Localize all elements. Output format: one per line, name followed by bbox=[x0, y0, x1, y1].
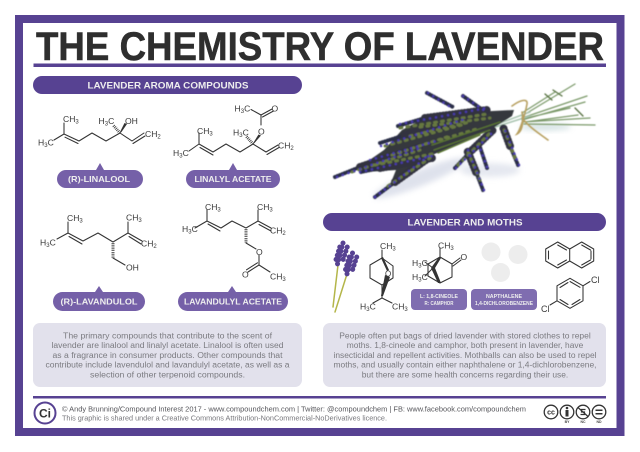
molecule: linalyl acetate: O bbox=[258, 126, 265, 136]
text block: aroma compounds: contribute include lavendulol and lavandulyl acetate, as well as a bbox=[46, 361, 290, 370]
molecule: lavandulol: 3 bbox=[46, 243, 50, 249]
stems bbox=[492, 84, 595, 128]
green stems over the mass bbox=[432, 122, 500, 153]
molecule: 1,8-cineole: CH bbox=[392, 302, 404, 312]
molecule: 1,8-cineole: 3 bbox=[392, 246, 396, 252]
icon: compound interest logo: Ci bbox=[39, 406, 51, 420]
text block: moths: but there are some health concerns regarding their use. bbox=[362, 370, 568, 379]
molecule: linalool: 3 bbox=[105, 122, 109, 128]
molecule: lavandulol: CH bbox=[126, 212, 138, 222]
panel: lavender aroma compounds bbox=[33, 76, 302, 387]
label: napthalene and dichlorobenzene bbox=[471, 289, 537, 310]
green buds bbox=[352, 114, 515, 186]
molecule: linalyl acetate: 2 bbox=[290, 146, 294, 152]
molecule: lavandulyl acetate bbox=[182, 202, 286, 283]
label: linalyl acetate: LINALYL ACETATE bbox=[194, 175, 272, 184]
molecule: 1,4-dichlorobenzene: Cl bbox=[541, 304, 550, 314]
label: cineole and camphor: L: 1,8-CINEOLE bbox=[420, 294, 459, 300]
molecule: linalyl acetate: 3 bbox=[209, 132, 213, 138]
molecule: lavandulyl acetate: C bbox=[192, 224, 198, 234]
molecule: lavandulyl acetate: H bbox=[182, 224, 188, 234]
molecule: camphor: C bbox=[422, 258, 428, 268]
molecule: camphor: H bbox=[412, 272, 418, 282]
spike bodies bbox=[360, 110, 510, 182]
credit line: © Andy Brunning/Compound Interest 2017 - www.compoundchem.com | Twitter: @compoundchem | FB: www.facebook.com/compoundchem bbox=[62, 406, 526, 414]
molecule: naphthalene bbox=[546, 242, 594, 268]
label: lavandulyl acetate: LAVANDULYL ACETATE bbox=[184, 298, 283, 306]
molecule: linalyl acetate: CH bbox=[197, 126, 209, 136]
molecule: lavandulyl acetate: 3 bbox=[188, 230, 192, 236]
molecule: linalyl acetate bbox=[173, 104, 294, 160]
molecule: camphor bbox=[412, 240, 468, 284]
title: THE CHEMISTRY OF LAVENDER bbox=[36, 25, 604, 69]
image: lavender bunch bbox=[335, 84, 595, 204]
molecule: 1,8-cineole: H bbox=[360, 302, 366, 312]
text block: aroma compounds: as a fragrance in consumer products. Other compounds that bbox=[52, 351, 283, 360]
molecule: linalool: C bbox=[48, 138, 54, 148]
molecule: camphor: CH bbox=[438, 240, 450, 250]
molecule: lavandulol bbox=[40, 212, 157, 272]
molecule: linalool: 2 bbox=[157, 134, 161, 140]
icon: creative commons licence bbox=[544, 405, 606, 424]
molecule: 1,8-cineole: 3 bbox=[404, 307, 408, 313]
label: napthalene and dichlorobenzene: NAPTHALENE bbox=[486, 294, 523, 300]
molecule: lavandulyl acetate: 3 bbox=[269, 208, 273, 214]
molecule: lavandulol: H bbox=[40, 238, 46, 248]
molecule: linalool: 3 bbox=[75, 120, 79, 126]
heading: aroma compounds bbox=[33, 76, 302, 94]
text block: aroma compounds: selection of other terpenoid compounds. bbox=[90, 370, 245, 379]
molecule: lavandulyl acetate: CH bbox=[270, 272, 282, 282]
text block: aroma compounds: lavender are linalool and linalyl acetate. Linalool is often used bbox=[52, 341, 284, 350]
molecule: linalool: OH bbox=[125, 116, 138, 126]
text block: moths bbox=[323, 323, 606, 387]
title rule bbox=[34, 64, 606, 67]
footer bbox=[33, 396, 606, 424]
molecule: camphor: O bbox=[460, 252, 468, 262]
molecule: camphor: 3 bbox=[418, 278, 422, 284]
icon: creative commons licence: ND bbox=[596, 420, 602, 424]
molecule: 1,8-cineole bbox=[360, 241, 408, 313]
label: (R)-lavandulol bbox=[53, 286, 145, 311]
text block: moths: moths. 1,8-cineole and camphor, both present in lavender, have bbox=[347, 341, 584, 350]
molecule: linalool: CH bbox=[63, 114, 75, 124]
molecule: linalyl acetate: 3 bbox=[239, 133, 243, 139]
heading: lavender and moths: LAVENDER AND MOTHS bbox=[408, 218, 522, 228]
molecule: linalool: 3 bbox=[44, 143, 48, 149]
licence line: This graphic is shared under a Creative Commons Attribution-NonCommercial-NoDerivatives licence. bbox=[62, 416, 387, 422]
molecule: lavandulyl acetate: CH bbox=[257, 202, 269, 212]
molecule: 1,8-cineole: O bbox=[385, 270, 391, 278]
molecule: linalool: CH bbox=[145, 129, 157, 139]
molecule: linalyl acetate: 3 bbox=[179, 154, 183, 160]
text block: aroma compounds bbox=[33, 323, 302, 387]
molecule: lavandulyl acetate: O bbox=[242, 270, 249, 280]
text block: moths: People often put bags of dried lavender with stored clothes to repel bbox=[339, 332, 591, 340]
molecule: linalool: H bbox=[38, 138, 44, 148]
panel: lavender and moths bbox=[323, 213, 606, 387]
molecule: linalyl acetate: 3 bbox=[241, 109, 245, 115]
molecule: lavandulyl acetate: O bbox=[256, 247, 263, 257]
molecule: linalool bbox=[38, 114, 161, 149]
label: cineole and camphor bbox=[411, 289, 467, 310]
molecule: lavandulol: 3 bbox=[138, 218, 142, 224]
dense mass of flowers bbox=[358, 110, 514, 180]
molecule: linalyl acetate: H bbox=[233, 128, 239, 138]
molecule: linalyl acetate: C bbox=[183, 148, 189, 158]
molecule: 1,8-cineole: C bbox=[370, 302, 376, 312]
icon: compound interest logo bbox=[34, 402, 56, 424]
molecule: linalool: C bbox=[108, 116, 114, 126]
molecule: lavandulol: OH bbox=[126, 262, 139, 272]
molecule: lavandulol: C bbox=[50, 238, 56, 248]
molecule: camphor: C bbox=[422, 272, 428, 282]
molecule: camphor: H bbox=[412, 258, 418, 268]
molecule: lavandulyl acetate: 3 bbox=[282, 277, 286, 283]
molecule: linalyl acetate: H bbox=[173, 148, 179, 158]
text block: moths: insecticidal and repellent activities. Mothballs can also be used to repel bbox=[334, 351, 597, 360]
molecule: linalool: H bbox=[98, 116, 105, 126]
icon: creative commons licence: cc bbox=[547, 410, 555, 416]
label: cineole and camphor: R: CAMPHOR bbox=[424, 301, 454, 307]
label: linalyl acetate bbox=[186, 163, 280, 188]
text block: aroma compounds: The primary compounds that contribute to the scent of bbox=[63, 332, 273, 340]
molecule: lavandulol: CH bbox=[67, 213, 79, 223]
molecule: lavandulyl acetate: CH bbox=[205, 202, 217, 212]
molecule: 1,4-dichlorobenzene: Cl bbox=[591, 275, 600, 285]
molecule: lavandulyl acetate: 3 bbox=[217, 208, 221, 214]
icon: lavender sprigs bbox=[333, 243, 357, 312]
molecule: linalyl acetate: O bbox=[272, 104, 278, 114]
molecule: linalyl acetate: H bbox=[234, 104, 241, 114]
purple florets bbox=[337, 93, 519, 197]
heading: aroma compounds: LAVENDER AROMA COMPOUNDS bbox=[88, 80, 248, 90]
label: lavandulyl acetate bbox=[178, 286, 288, 311]
label: napthalene and dichlorobenzene: 1,4-DICHLOROBENZENE bbox=[475, 301, 533, 307]
molecule: camphor: 3 bbox=[450, 246, 454, 252]
molecule: lavandulol: 3 bbox=[79, 218, 83, 224]
icon: mothballs bbox=[482, 242, 528, 282]
icon: creative commons licence: BY bbox=[565, 420, 570, 424]
spike tips bbox=[335, 93, 518, 197]
molecule: 1,8-cineole: 3 bbox=[366, 307, 370, 313]
molecule: linalyl acetate: CH bbox=[278, 140, 290, 150]
molecule: lavandulol: 2 bbox=[153, 244, 157, 250]
label: (R)-lavandulol: (R)-LAVANDULOL bbox=[60, 298, 138, 306]
text block: moths: moths, and usually contain either naphthalene or 1,4-dichlorobenzene, bbox=[334, 361, 596, 370]
label: (R)-linalool: (R)-LINALOOL bbox=[68, 175, 130, 184]
molecule: lavandulyl acetate: CH bbox=[270, 226, 282, 236]
icon: creative commons licence: NC bbox=[580, 420, 586, 424]
molecule: 1,4-dichlorobenzene bbox=[541, 275, 600, 314]
molecule: linalyl acetate: C bbox=[243, 128, 249, 138]
twine bbox=[512, 100, 548, 140]
molecule: lavandulol: CH bbox=[141, 238, 153, 248]
heading: lavender and moths bbox=[323, 213, 606, 231]
molecule: linalyl acetate: C bbox=[244, 104, 250, 114]
label: (R)-linalool bbox=[57, 163, 143, 188]
molecule: camphor: 3 bbox=[418, 264, 422, 270]
molecule: 1,8-cineole: CH bbox=[380, 241, 392, 251]
molecule: lavandulyl acetate: 2 bbox=[282, 231, 286, 237]
